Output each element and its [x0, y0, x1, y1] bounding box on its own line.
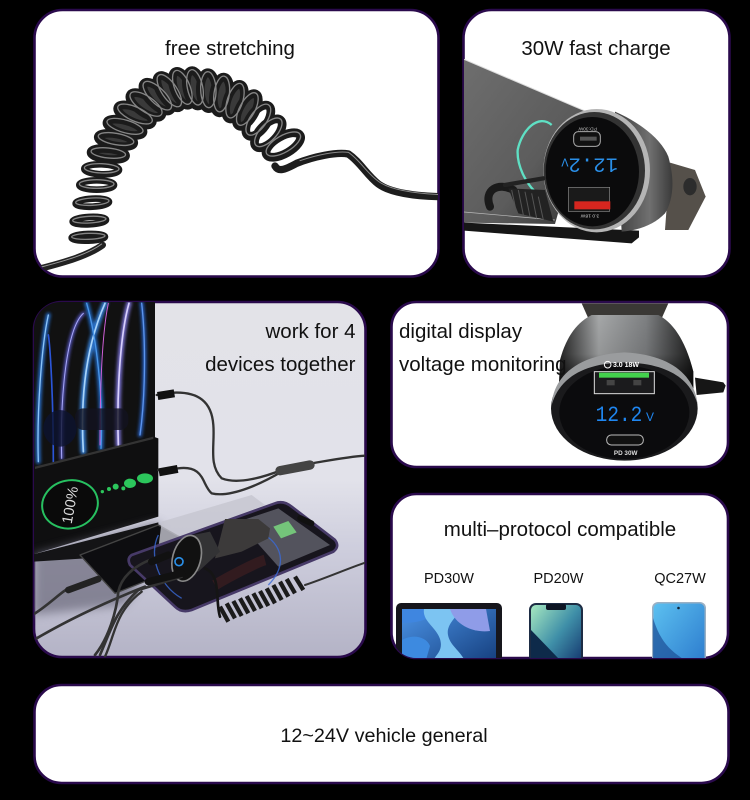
device: tablet [396, 603, 502, 658]
heading: multi-protocol compatible: multi–protocol compatible [444, 518, 676, 541]
panel: 12~24V vehicle general [34, 685, 728, 783]
readout: 12.2V upside down: 12.2V [560, 152, 618, 175]
coiled cable behind charger [488, 178, 553, 222]
caption: work for 4 devices together: devices together [205, 353, 356, 376]
caption: digital display voltage monitoring: voltage monitoring [399, 353, 567, 376]
device label: PD20W: PD20W [534, 571, 584, 587]
cables [35, 393, 365, 657]
caption: work for 4 devices together: work for 4 [264, 320, 356, 343]
panel: multi-protocol compatible [392, 494, 728, 673]
charger front view [551, 303, 726, 461]
panel: digital display voltage monitoring [392, 302, 728, 467]
charger mounted on mirror illustration [464, 59, 706, 243]
port label: 3.0 18W: 3.0 18W [613, 362, 639, 369]
voltage unit: V [646, 410, 654, 424]
caption: 12~24V vehicle general: 12~24V vehicle general [280, 725, 488, 747]
panel: work for 4 devices together [33, 302, 366, 657]
device: iPhone [529, 603, 583, 658]
device: Android phone [652, 602, 706, 658]
purple phone [129, 502, 337, 611]
device label: QC27W: QC27W [654, 571, 706, 587]
caption: digital display voltage monitoring [399, 320, 567, 376]
port label: 3.0 18W: 3.0 18W [580, 212, 599, 218]
desk scene with tablets and phones [33, 302, 365, 657]
panel: 30W fast charge [464, 10, 730, 276]
device label: PD30W: PD30W [424, 571, 474, 587]
caption: digital display voltage monitoring: digital display [399, 320, 523, 343]
port label: PD 30W: PD 30W [614, 450, 637, 457]
coiled cable on desk [220, 577, 303, 622]
heading: free stretching: free stretching [165, 37, 295, 60]
coiled cable illustration [40, 68, 440, 269]
black wedge under tablet [33, 522, 158, 562]
dark phone [79, 524, 180, 594]
heading: 30W fast charge: 30W fast charge [521, 37, 671, 60]
charger on phone [215, 519, 270, 558]
port label: PD 30W: PD:30W [578, 126, 597, 132]
panel: free stretching [34, 10, 440, 276]
voltage readout: 12.2 [596, 403, 642, 428]
shadow under tablet [33, 522, 165, 615]
battery readout: 100%: 100% [60, 485, 82, 525]
caption: work for 4 devices together [205, 320, 356, 376]
